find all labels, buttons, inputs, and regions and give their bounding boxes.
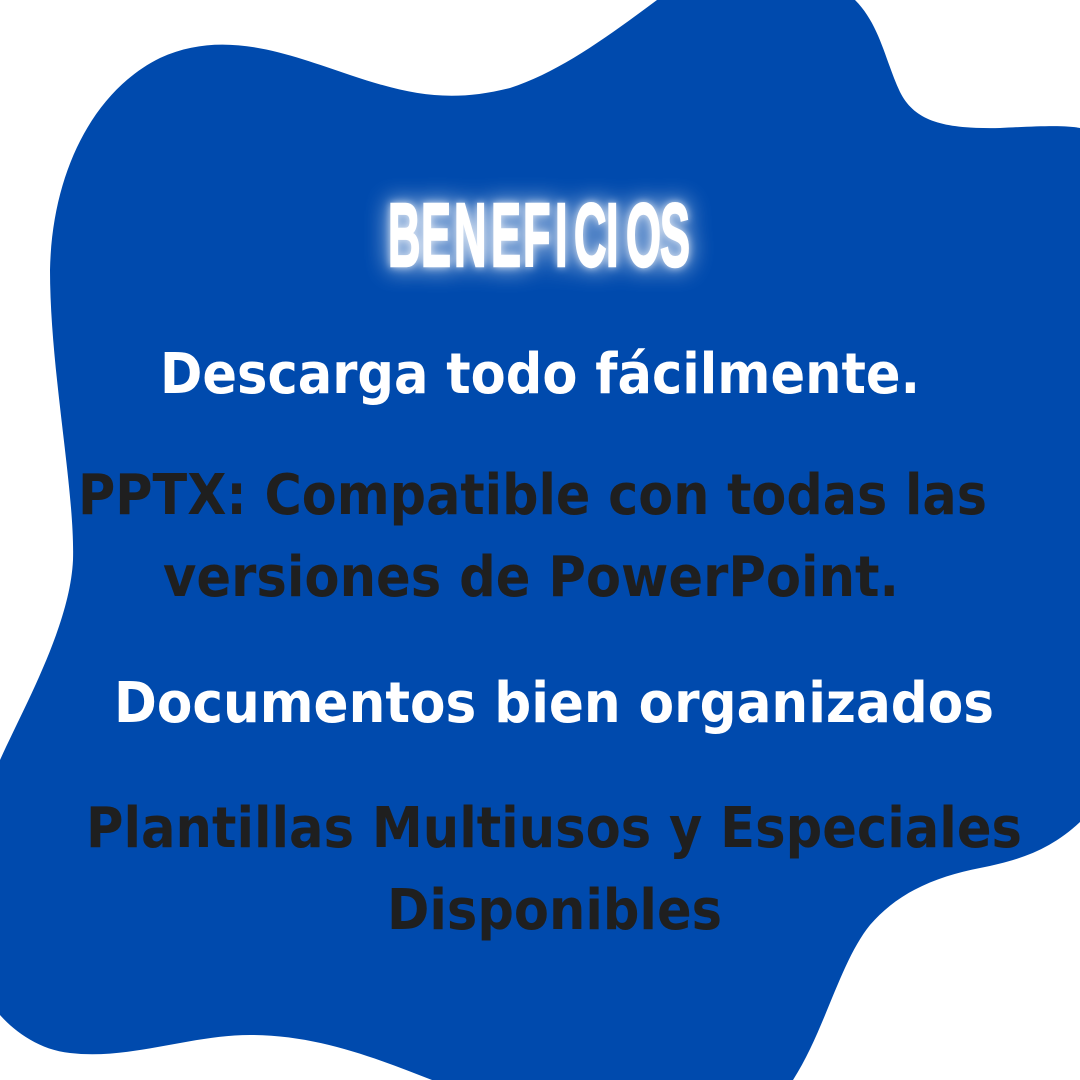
- title: BENEFICIOS: BENEFICIOS: [388, 186, 690, 286]
- benefit: multipurpose templates: Plantillas Multiusos y Especiales: [86, 796, 1022, 861]
- benefit: multipurpose templates: [86, 796, 1022, 943]
- title: BENEFICIOS: BENEFICIOS: [388, 186, 690, 286]
- benefit: multipurpose templates: Disponibles: [387, 878, 722, 943]
- benefit: easy download: Descarga todo fácilmente.: [160, 342, 920, 407]
- benefit: PPTX compatibility: versiones de PowerPoint.: [163, 545, 899, 610]
- benefit: PPTX compatibility: PPTX: Compatible con todas las: [78, 463, 987, 528]
- title: BENEFICIOS: BENEFICIOS: [388, 186, 690, 286]
- benefit: organized documents: Documentos bien organizados: [114, 671, 994, 736]
- benefit: PPTX compatibility: [78, 463, 987, 610]
